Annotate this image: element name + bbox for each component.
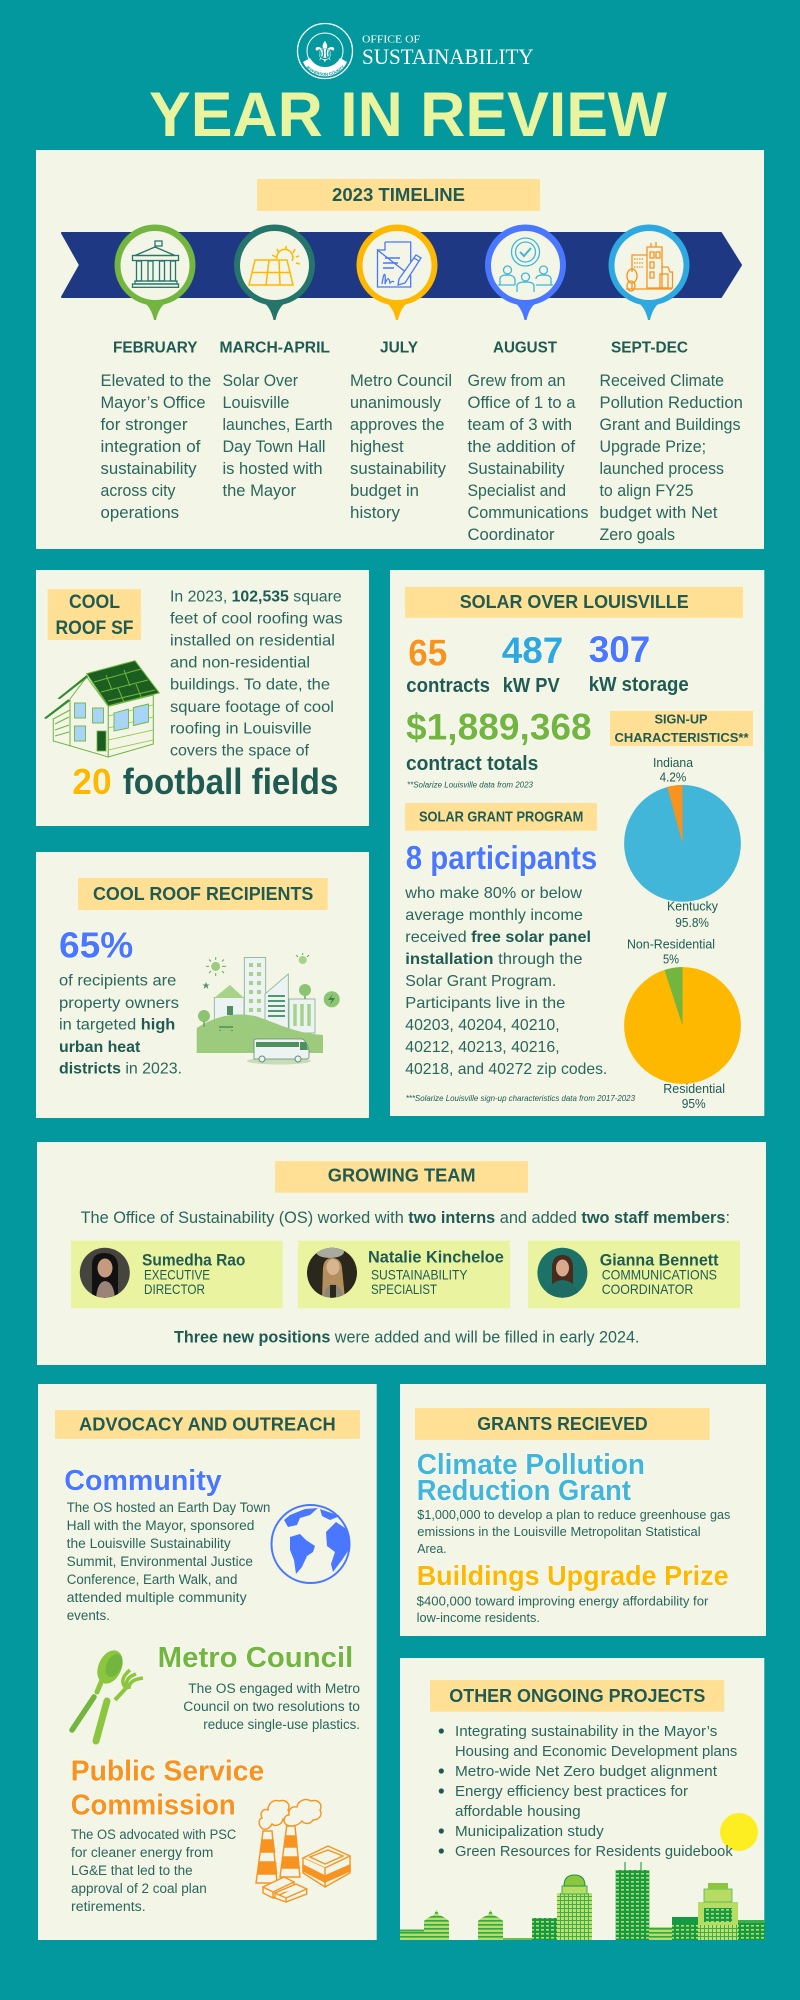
pie chart: Indiana vs Kentucky: 4.2% <box>660 770 686 784</box>
panel: advocacy and outreach <box>38 1384 377 1940</box>
section: community: Hall with the Mayor, sponsored <box>67 1518 254 1533</box>
stat: contract totals: **Solarize Louisville data from 2023 <box>407 780 533 790</box>
stat: 20 football fields: football fields <box>123 761 338 802</box>
timeline column: February: Mayor’s Office <box>100 394 206 412</box>
timeline column: July: sustainability <box>350 460 447 478</box>
stat: 307 kW storage: 307 <box>589 629 650 670</box>
stat: contract totals: $1,889,368 <box>406 707 592 748</box>
stat: 487 kW PV: 487 <box>502 630 563 671</box>
timeline column: July: JULY <box>380 340 419 357</box>
icon: February pin, government building <box>114 224 196 320</box>
card: Gianna Bennett: Gianna Bennett <box>600 1252 719 1270</box>
photo: Natalie Kincheloe <box>306 1246 358 1299</box>
card: Sumedha Rao: DIRECTOR <box>144 1281 205 1297</box>
grant: Buildings Upgrade Prize: Buildings Upgrade Prize <box>417 1560 729 1591</box>
heading: growing team <box>275 1161 528 1193</box>
text: solar grant description <box>404 885 607 1078</box>
card: Gianna Bennett <box>528 1241 740 1308</box>
icon: spoon and fork <box>72 1646 143 1741</box>
section: Metro Council: Metro Council <box>158 1642 353 1674</box>
pie chart: residential vs non-residential: Non-Residential <box>627 938 715 952</box>
heading: solar grant program: SOLAR GRANT PROGRAM <box>419 808 583 825</box>
heading: grants recieved: GRANTS RECIEVED <box>477 1414 648 1434</box>
section: community: Community <box>64 1465 222 1497</box>
text: solar grant description: 40203, 40204, 40210, <box>405 1017 560 1034</box>
section: Public Service Commission: approval of 2 coal plan <box>71 1881 207 1896</box>
text: solar grant description: 40212, 40213, 40216, <box>405 1039 560 1056</box>
panel: cool roof recipients <box>36 852 369 1118</box>
timeline column: August: Sustainability <box>468 460 565 478</box>
timeline column: February: integration of <box>100 438 201 456</box>
text: cool roofing description: feet of cool roofing was <box>170 611 343 628</box>
panel: cool roof SF <box>36 570 369 826</box>
timeline column: August: Office of 1 to a <box>468 394 576 412</box>
section: community: Summit, Environmental Justice <box>67 1554 253 1569</box>
heading: advocacy and outreach: ADVOCACY AND OUTREACH <box>79 1414 336 1434</box>
heading: cool roof recipients: COOL ROOF RECIPIENTS <box>93 884 313 904</box>
heading: 2023 timeline: 2023 TIMELINE <box>332 185 465 205</box>
card: Natalie Kincheloe: SUSTAINABILITY <box>371 1266 468 1282</box>
text: recipients description <box>59 973 182 1078</box>
text: solar grant description: Solar Grant Program. <box>405 973 556 990</box>
section: Public Service Commission: retirements. <box>71 1899 146 1914</box>
heading: cool roof recipients <box>78 878 328 910</box>
stat: contract totals: contract totals <box>406 753 538 775</box>
pie chart: Indiana vs Kentucky: Indiana <box>653 756 693 770</box>
timeline column: March-April: Day Town Hall <box>222 438 326 456</box>
pie chart: Indiana vs Kentucky: Kentucky <box>667 900 719 914</box>
timeline column: February: for stronger <box>100 416 188 434</box>
section: community <box>64 1465 270 1623</box>
timeline column: March-April: is hosted with <box>222 460 322 478</box>
timeline column: March-April: MARCH-APRIL <box>220 340 330 357</box>
icon: March-April pin, solar panel <box>234 224 315 320</box>
stat: 65%: 65% <box>59 924 133 966</box>
timeline column: February: operations <box>100 504 179 522</box>
timeline column: February: sustainability <box>100 460 197 478</box>
heading: growing team: GROWING TEAM <box>328 1166 476 1186</box>
stat: 65 contracts: contracts <box>406 675 490 697</box>
photo: Sumedha Rao <box>79 1247 131 1299</box>
timeline column: March-April: launches, Earth <box>222 416 332 434</box>
grant: Climate Pollution Reduction Grant: emissions in the Louisville Metropolitan Statistical <box>417 1525 701 1539</box>
stat: 65 contracts: 65 <box>408 633 447 674</box>
section: community: Conference, Earth Walk, and <box>67 1572 237 1587</box>
timeline column: August: Coordinator <box>468 526 555 544</box>
timeline column: March-April: Louisville <box>222 394 290 412</box>
grant: Buildings Upgrade Prize: low-income residents. <box>417 1611 540 1625</box>
timeline column: Sept-Dec: SEPT-DEC <box>611 340 688 357</box>
text: solar grant description: who make 80% or below <box>404 885 582 902</box>
text: cool roofing description: roofing in Louisville <box>170 721 312 738</box>
timeline column: August: Communications <box>468 504 588 522</box>
card: Gianna Bennett: COMMUNICATIONS <box>602 1266 717 1282</box>
text: three new positions: Three new positions were added and will be filled in early 2024. <box>174 1329 640 1347</box>
timeline column: Sept-Dec: Zero goals <box>600 526 675 544</box>
icon: Sept-Dec pin, city buildings <box>608 224 690 320</box>
stat: 20 football fields: 20 <box>72 761 112 802</box>
bullet list: projects: Housing and Economic Development plans <box>455 1744 737 1760</box>
text: cool roofing description: In 2023, 102,535 square <box>170 588 342 605</box>
section: Public Service Commission: Public Service <box>71 1756 264 1788</box>
arrow ribbon <box>62 233 741 297</box>
timeline column: July: unanimously <box>350 394 442 412</box>
timeline column: Sept-Dec <box>600 340 743 544</box>
section: community: the Louisville Sustainability <box>67 1536 231 1551</box>
bullet list: projects: Integrating sustainability in the Mayor’s <box>455 1724 717 1740</box>
section: Metro Council: reduce single-use plastics. <box>203 1717 360 1732</box>
timeline column: Sept-Dec: launched process <box>600 460 724 478</box>
card: Natalie Kincheloe <box>298 1241 510 1308</box>
heading: sign-up characteristics <box>610 711 753 746</box>
icon: sun <box>720 1813 758 1851</box>
section: community: The OS hosted an Earth Day Town <box>67 1500 270 1515</box>
text: solar grant description: average monthly income <box>405 907 583 924</box>
text: recipients description: property owners <box>59 995 179 1012</box>
timeline column: Sept-Dec: to align FY25 <box>600 482 694 500</box>
title: YEAR IN REVIEW <box>149 80 668 150</box>
timeline column: August: Specialist and <box>468 482 566 500</box>
card: Sumedha Rao <box>71 1241 283 1308</box>
bullet list: projects: Municipalization study <box>455 1824 604 1840</box>
text: recipients description: of recipients are <box>59 973 176 990</box>
timeline column: February <box>100 340 211 522</box>
timeline column: July: history <box>350 504 401 522</box>
timeline column: August: Grew from an <box>468 372 566 390</box>
heading: solar over Louisville: SOLAR OVER LOUISVILLE <box>460 591 689 612</box>
timeline column: March-April: Solar Over <box>222 372 298 390</box>
icon: Louisville seal: JEFFERSON COUNTY <box>306 65 344 76</box>
text: cool roofing description: installed on residential <box>170 633 335 650</box>
logo wordmark: SUSTAINABILITY <box>362 44 534 69</box>
section: Public Service Commission: LG&E that led to the <box>71 1863 193 1878</box>
timeline column: August: AUGUST <box>493 340 558 357</box>
text: cool roofing description: square footage of cool <box>170 699 334 716</box>
heading: solar grant program <box>405 803 597 831</box>
footnote: sign-up data: ***Solarize Louisville sign-up characteristics data from 2017-2023 <box>406 1093 635 1103</box>
text: recipients description: districts in 2023. <box>59 1061 182 1078</box>
timeline column: February: Elevated to the <box>100 372 211 390</box>
grant: Climate Pollution Reduction Grant: $1,000,000 to develop a plan to reduce greenhouse gas <box>417 1508 730 1522</box>
heading: grants recieved <box>415 1408 710 1440</box>
bullet list: projects: Metro-wide Net Zero budget alignment <box>455 1764 717 1780</box>
text: team intro: The Office of Sustainability (OS) worked with two interns and added two staff members: <box>81 1209 730 1227</box>
card: Sumedha Rao: EXECUTIVE <box>144 1266 210 1282</box>
text: solar grant description: Participants live in the <box>405 995 565 1012</box>
section: Metro Council: Council on two resolutions to <box>183 1699 360 1714</box>
card: Sumedha Rao: Sumedha Rao <box>142 1252 245 1270</box>
stat: 307 kW storage <box>589 629 689 696</box>
timeline column: July <box>350 340 452 522</box>
panel: grants received <box>400 1384 766 1636</box>
timeline column: February: FEBRUARY <box>113 340 198 357</box>
timeline column: July: budget in <box>350 482 419 500</box>
pie chart: residential vs non-residential: 95% <box>682 1097 706 1111</box>
timeline column: Sept-Dec: Grant and Buildings <box>600 416 740 434</box>
text: cool roofing description: covers the space of <box>170 743 310 760</box>
timeline column: August: the addition of <box>468 438 576 456</box>
text: cool roofing description <box>170 588 343 760</box>
panel: growing team <box>37 1142 766 1365</box>
icon: Louisville seal: ⚜ <box>312 35 338 69</box>
section: Public Service Commission: for cleaner energy from <box>71 1845 213 1860</box>
text: cool roofing description: buildings. To date, the <box>170 677 330 694</box>
text: recipients description: urban heat <box>59 1039 141 1056</box>
stat: 307 kW storage: kW storage <box>589 674 689 696</box>
heading: 2023 timeline <box>257 179 540 211</box>
grant: Climate Pollution Reduction Grant: Area. <box>417 1542 447 1556</box>
heading: advocacy and outreach <box>55 1410 360 1439</box>
stat: 487 kW PV: kW PV <box>503 675 560 697</box>
grant: Climate Pollution Reduction Grant: Reduction Grant <box>417 1475 631 1507</box>
skyline illustration <box>400 1862 765 1940</box>
icon: globe <box>272 1505 350 1583</box>
icon: July pin, signed document <box>356 224 438 320</box>
panel: 2023 timeline <box>36 150 764 549</box>
stat: contract totals <box>406 707 592 790</box>
pie chart: residential vs non-residential <box>624 938 741 1111</box>
heading: cool roof SF: ROOF SF <box>56 618 134 639</box>
icon: green city illustration <box>197 953 340 1064</box>
grant: Climate Pollution Reduction Grant <box>417 1449 730 1556</box>
timeline column: Sept-Dec: Upgrade Prize; <box>600 438 706 456</box>
pie chart: Indiana vs Kentucky: 95.8% <box>675 916 709 930</box>
timeline column: July: Metro Council <box>350 372 452 390</box>
heading: other ongoing projects: OTHER ONGOING PROJECTS <box>449 1686 705 1706</box>
timeline column: Sept-Dec: Received Climate <box>600 372 724 390</box>
icon: Louisville seal <box>296 22 354 80</box>
timeline column: Sept-Dec: Pollution Reduction <box>600 394 743 412</box>
section: Metro Council <box>158 1642 360 1732</box>
section: community: attended multiple community <box>67 1590 247 1605</box>
icon: house with cool roof <box>44 661 159 757</box>
pie chart: Indiana vs Kentucky <box>624 756 741 930</box>
bullet list: projects: affordable housing <box>455 1804 581 1820</box>
heading: other ongoing projects <box>430 1680 724 1712</box>
logo: Office of Sustainability <box>296 22 534 80</box>
logo wordmark: OFFICE OF <box>362 35 420 46</box>
heading: cool roof SF <box>48 589 141 640</box>
panel: solar over Louisville <box>390 570 764 1116</box>
bullet list: projects: Energy efficiency best practices for <box>455 1784 688 1800</box>
timeline column: February: across city <box>100 482 176 500</box>
section: Public Service Commission: The OS advocated with PSC <box>71 1827 237 1842</box>
grant: Buildings Upgrade Prize: $400,000 toward improving energy affordability for <box>417 1594 708 1608</box>
text: solar grant description: installation through the <box>405 951 583 968</box>
photo: Gianna Bennett <box>536 1247 588 1299</box>
icon: August pin, team and badge <box>485 224 566 320</box>
timeline column: July: approves the <box>350 416 444 434</box>
stat: 487 kW PV <box>502 630 563 697</box>
bullet list: projects <box>439 1724 737 1860</box>
icon: power plant <box>256 1800 350 1902</box>
text: recipients description: in targeted high <box>59 1017 175 1034</box>
timeline column: March-April: the Mayor <box>222 482 296 500</box>
heading: sign-up characteristics: CHARACTERISTICS** <box>614 730 749 745</box>
stat: 65 contracts <box>406 633 490 697</box>
text: solar grant description: 40218, and 40272 zip codes. <box>405 1061 607 1078</box>
panel: other ongoing projects <box>400 1658 765 1940</box>
bullet list: projects: Green Resources for Residents guidebook <box>455 1844 733 1860</box>
card: Gianna Bennett: COORDINATOR <box>602 1281 693 1297</box>
heading: solar over Louisville <box>405 587 743 618</box>
timeline column: Sept-Dec: budget with Net <box>600 504 718 522</box>
section: Public Service Commission: Commission <box>71 1790 236 1822</box>
timeline column: July: highest <box>350 438 404 456</box>
stat: 8 participants: 8 participants <box>406 839 597 876</box>
timeline column: August <box>468 340 588 544</box>
section: community: events. <box>67 1608 110 1623</box>
card: Natalie Kincheloe: SPECIALIST <box>371 1281 437 1297</box>
text: solar grant description: received free solar panel <box>405 929 591 946</box>
timeline column: August: team of 3 with <box>468 416 572 434</box>
heading: cool roof SF: COOL <box>69 592 120 613</box>
grant: Climate Pollution Reduction Grant: Climate Pollution <box>417 1449 645 1481</box>
card: Natalie Kincheloe: Natalie Kincheloe <box>368 1249 504 1267</box>
timeline column: March-April <box>220 340 332 500</box>
pie chart: residential vs non-residential: Residential <box>663 1082 725 1096</box>
pie chart: residential vs non-residential: 5% <box>663 953 679 967</box>
section: Metro Council: The OS engaged with Metro <box>188 1681 360 1696</box>
text: cool roofing description: and non-residential <box>170 654 310 672</box>
heading: sign-up characteristics: SIGN-UP <box>654 712 708 727</box>
section: Public Service Commission <box>71 1756 264 1914</box>
grant: Buildings Upgrade Prize <box>417 1560 729 1625</box>
